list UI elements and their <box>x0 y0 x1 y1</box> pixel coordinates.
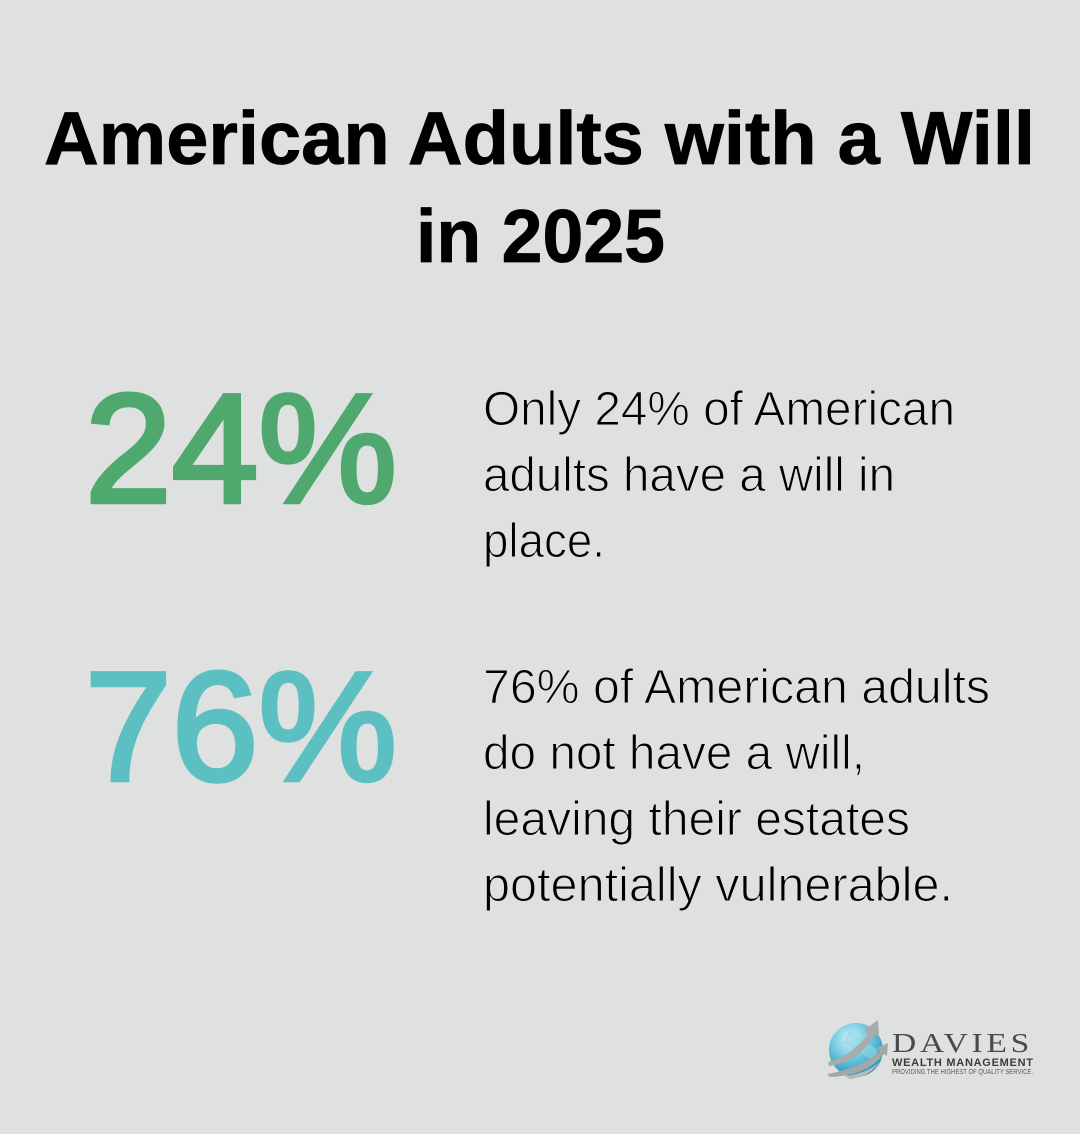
text: 76% description: potentially vulnerable. <box>483 859 953 912</box>
stat: 76%: 76% <box>85 640 397 813</box>
logo subtitle: WEALTH MANAGEMENT <box>892 1057 1033 1069</box>
stat: 24%: 24% <box>85 362 397 535</box>
text: 76% description <box>483 661 990 912</box>
text: 24% description: place. <box>483 515 605 568</box>
icon: globe with arrows <box>827 1020 888 1079</box>
logo: Davies Wealth Management <box>827 1020 1033 1079</box>
title: in 2025 <box>416 194 665 278</box>
text: 76% description: do not have a will, <box>483 727 865 780</box>
text: 24% description: Only 24% of American <box>483 383 955 436</box>
text: 24% description: adults have a will in <box>483 449 895 502</box>
logo tagline: PROVIDING THE HIGHEST OF QUALITY SERVICE. <box>892 1069 1033 1076</box>
logo wordmark: DAVIES <box>892 1028 1033 1058</box>
text: 76% description: 76% of American adults <box>483 661 990 714</box>
text: 24% description <box>483 383 955 568</box>
title: American Adults with a Will <box>44 96 1035 180</box>
text: 76% description: leaving their estates <box>483 793 910 846</box>
title <box>44 96 1035 278</box>
